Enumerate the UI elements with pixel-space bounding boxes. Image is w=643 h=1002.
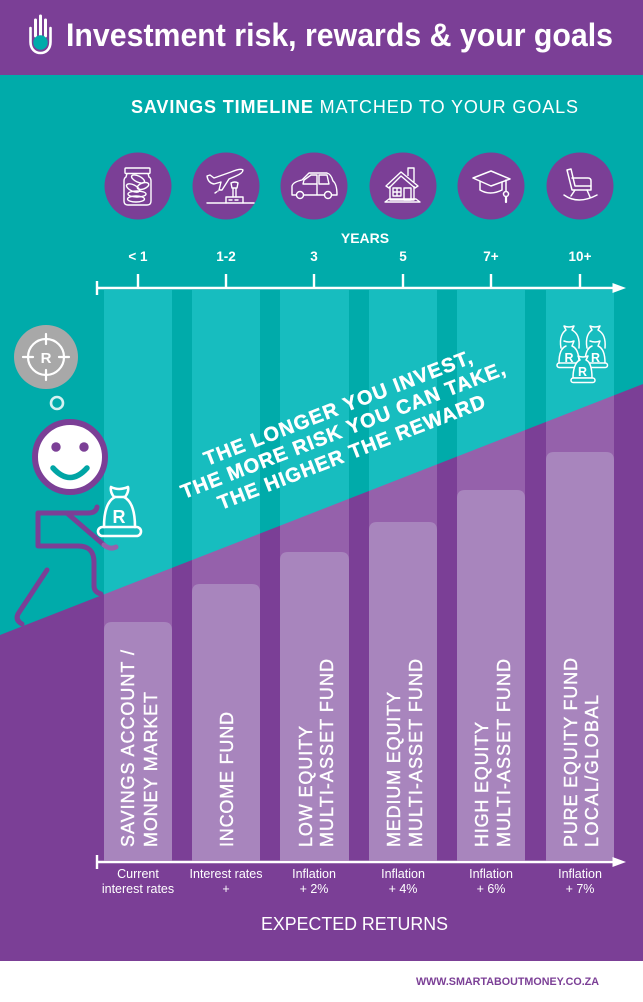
expected return labels: Interest rates [190,867,262,881]
purple diagonal background [0,384,643,961]
columns: upper timeline bands [104,290,614,650]
diagonal message: THE LONGER YOU INVEST, [201,347,475,471]
head [35,422,105,492]
fund names: SAVINGS ACCOUNT / [118,650,138,847]
year labels: 1-2 [216,249,236,264]
fund names [118,650,602,847]
year labels: 5 [399,249,407,264]
arrow: returns axis [97,855,626,869]
year labels: < 1 [128,249,148,264]
fund names: HIGH EQUITY [472,722,492,847]
arrow: years axis [97,274,626,295]
expected return labels: interest rates [102,882,174,896]
icon: graduation cap [458,152,524,220]
expected return labels: + 2% [300,882,328,896]
eyes [51,442,89,452]
expected return labels [102,867,602,896]
goal icons row [104,152,614,220]
icon: target thought bubble [14,325,78,389]
fund names: MONEY MARKET [141,692,161,847]
icon: rocking chair [546,152,614,220]
body and limbs [38,507,101,594]
returns heading: EXPECTED RETURNS [261,914,448,934]
icon: money bags: R [578,365,587,379]
expected return labels: + 4% [389,882,417,896]
fund names: MULTI-ASSET FUND [494,659,514,847]
fund names: PURE EQUITY FUND [561,658,581,847]
expected return labels: Inflation [469,867,513,881]
expected return labels: + 6% [477,882,505,896]
icon: money bag [98,487,141,536]
years heading: YEARS [341,230,389,246]
expected return labels: + 7% [566,882,594,896]
stick figure [17,422,116,624]
diagonal message: THE HIGHER THE REWARD [215,391,489,515]
fund names: MULTI-ASSET FUND [317,659,337,847]
fund names: LOCAL/GLOBAL [582,695,602,847]
expected return labels: Inflation [381,867,425,881]
fund names: INCOME FUND [217,712,237,847]
fund names: MEDIUM EQUITY [384,692,404,847]
fund names: MULTI-ASSET FUND [406,659,426,847]
icon: money bags: R [564,351,574,365]
fund names: LOW EQUITY [296,726,316,847]
year labels: 7+ [483,249,499,264]
year labels: 10+ [569,249,592,264]
icon: money bags: R [591,351,600,365]
year labels: 3 [310,249,318,264]
expected return labels: Current [117,867,159,881]
footer band [0,961,643,1002]
fund bars [104,452,614,860]
title: Investment risk, rewards & your goals [66,17,613,53]
thought bubble ring [51,397,63,409]
expected return labels: Inflation [558,867,602,881]
icon: aeroplane and tower [192,152,260,220]
columns: lower bands over purple [104,395,614,861]
icon: savings jar [104,152,172,220]
website: WWW.SMARTABOUTMONEY.CO.ZA [416,976,599,988]
icon: car [280,152,348,220]
subtitle: SAVINGS TIMELINE MATCHED TO YOUR GOALS [131,97,578,117]
icon: money bag: R [112,507,126,527]
icon: house [370,152,436,220]
icon: target thought bubble: R [41,350,52,367]
expected return labels: + [222,882,230,896]
year labels [128,249,592,264]
header band [0,0,643,75]
smile [53,468,87,478]
expected return labels: Inflation [292,867,336,881]
diagonal message: THE MORE RISK YOU CAN TAKE, [178,358,508,504]
icon: hand logo [30,16,50,53]
icon: money bags [557,326,608,382]
